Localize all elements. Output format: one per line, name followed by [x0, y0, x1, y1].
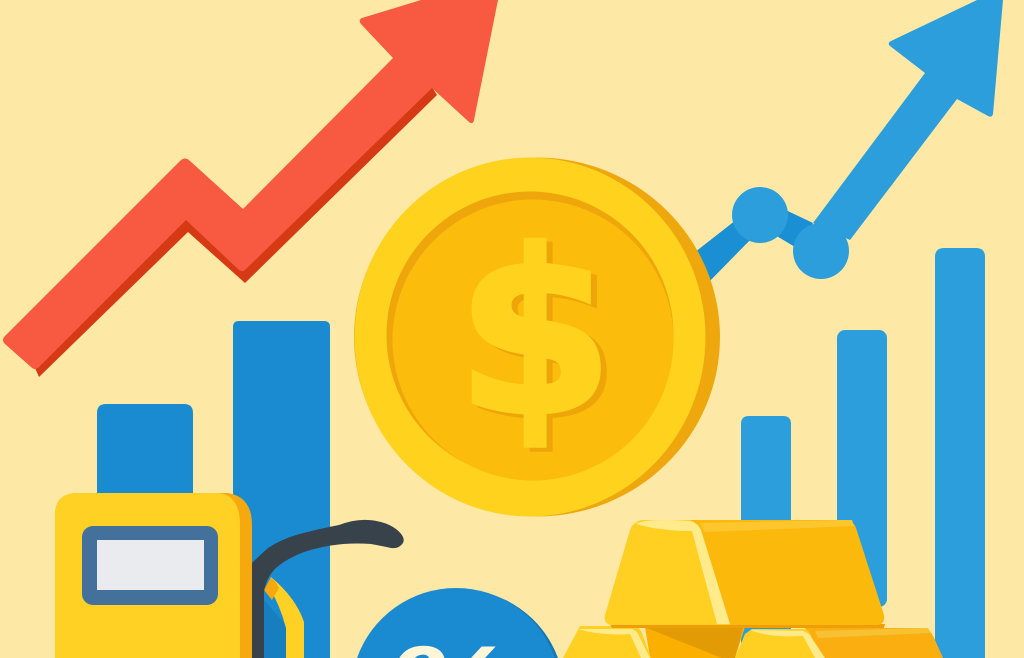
lower right gold bar [735, 628, 943, 658]
left bar chart [97, 321, 330, 658]
percent badge [357, 588, 558, 658]
fuel pump [55, 493, 404, 658]
red rising arrow [3, 0, 498, 377]
lower left gold bar [563, 626, 745, 658]
gold bars [563, 520, 943, 658]
fuel hose [252, 520, 404, 658]
pump body [55, 493, 252, 658]
right bar chart [741, 248, 985, 658]
dollar sign: $ [456, 203, 614, 466]
nozzle holder [264, 600, 286, 658]
blue rising arrow [690, 0, 1003, 288]
dollar sign shadow: $ [462, 207, 620, 470]
pump display [82, 526, 218, 605]
top gold bar [605, 520, 885, 628]
gold dollar coin [354, 158, 720, 516]
